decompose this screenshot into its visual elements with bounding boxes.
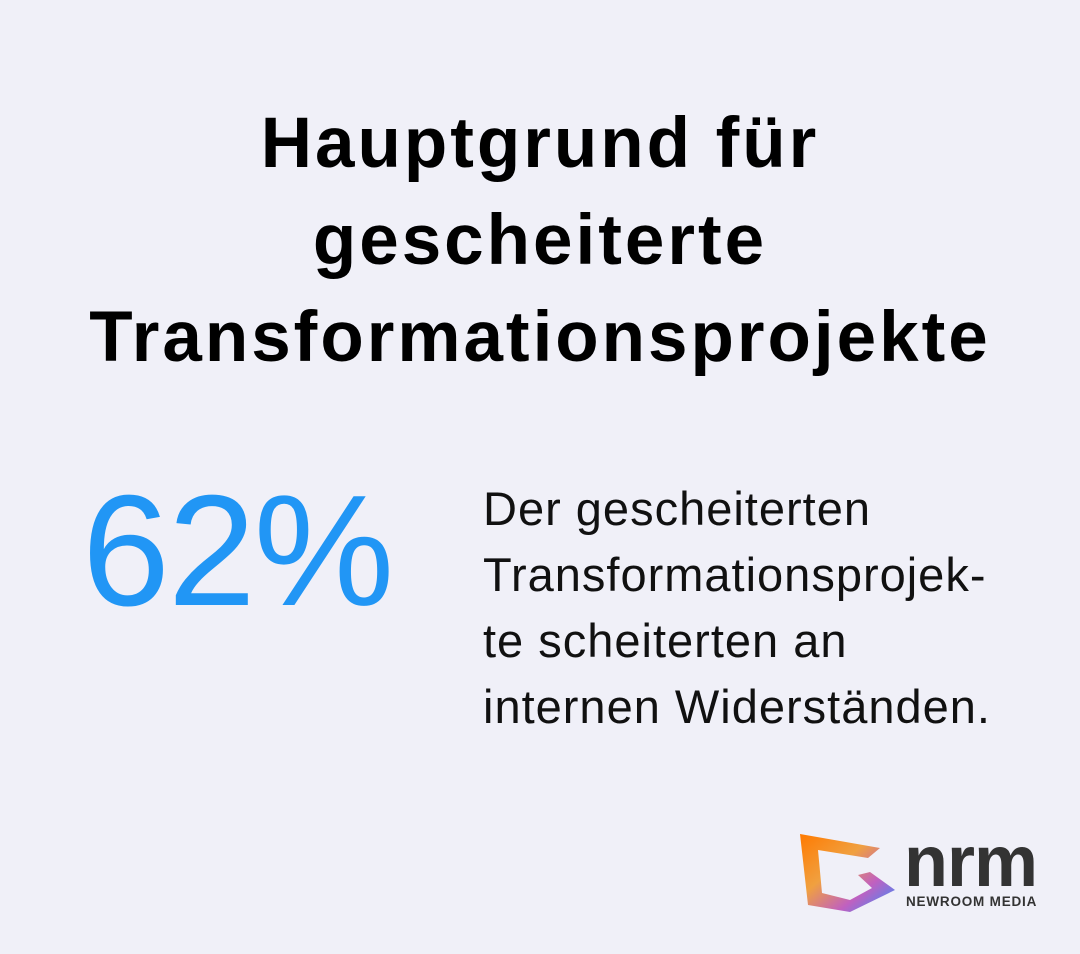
description: Der gescheiterten bbox=[483, 482, 871, 535]
description: Transformationsprojek- bbox=[483, 548, 986, 601]
logo: NEWROOM MEDIA bbox=[906, 894, 1037, 909]
description: te scheiterten an bbox=[483, 614, 848, 667]
logo bbox=[800, 830, 1037, 912]
description bbox=[483, 482, 991, 733]
title: Hauptgrund für bbox=[261, 104, 819, 183]
description: internen Widerständen. bbox=[483, 680, 991, 733]
title: Transformationsprojekte bbox=[89, 298, 991, 377]
big statistic: 62% bbox=[82, 463, 392, 639]
title: gescheiterte bbox=[313, 201, 767, 280]
title bbox=[89, 104, 991, 377]
